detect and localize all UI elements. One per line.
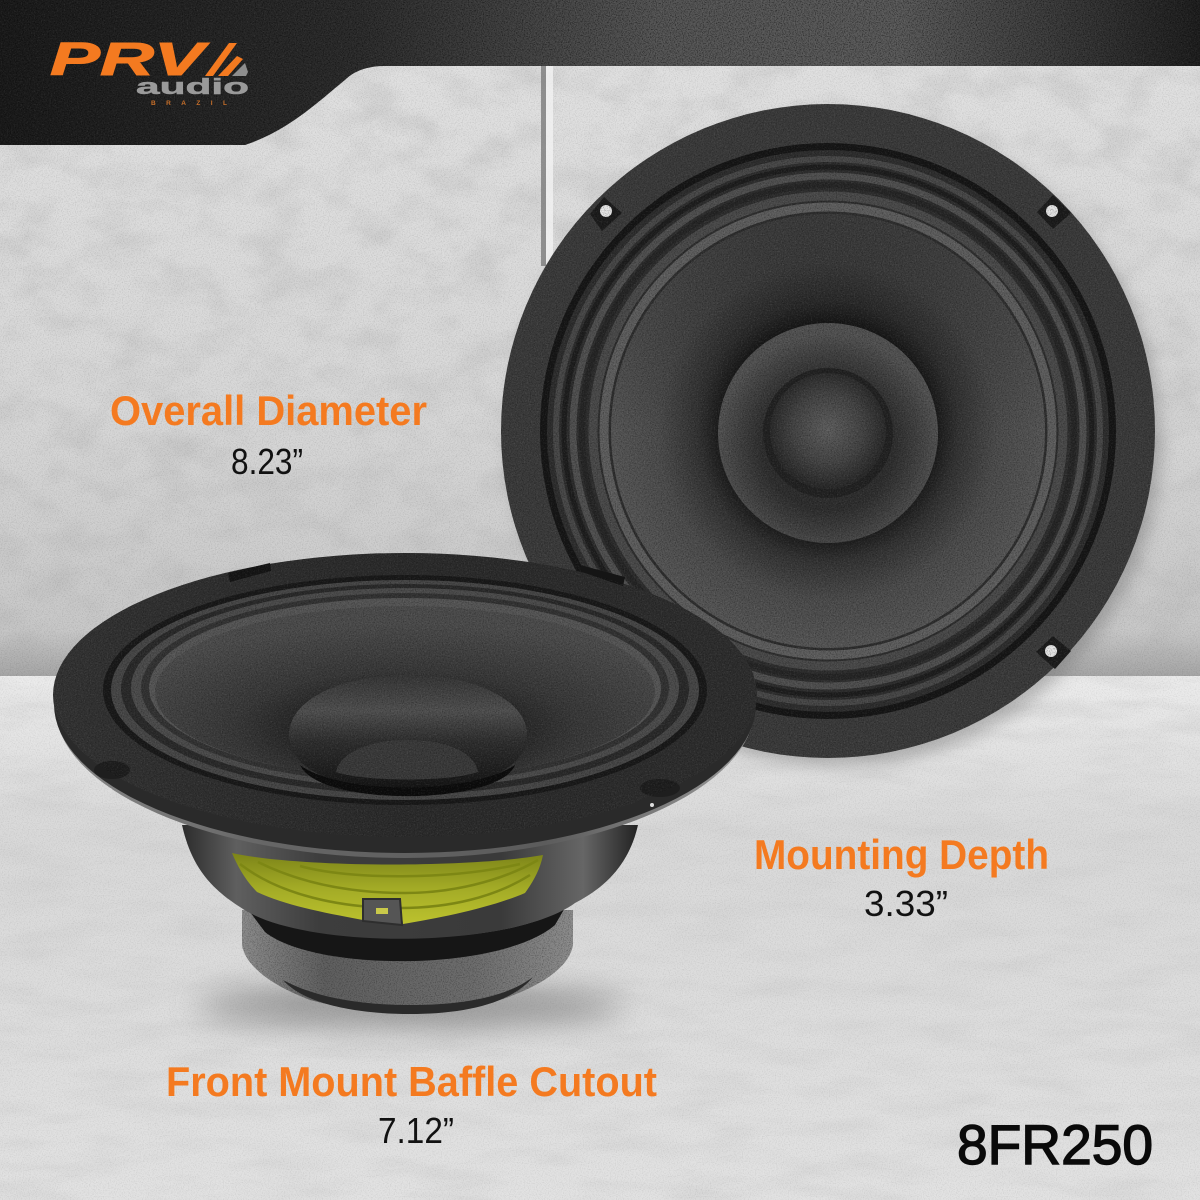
magnet xyxy=(242,910,573,1012)
cone xyxy=(155,606,655,778)
phase plug xyxy=(289,675,527,795)
coil window xyxy=(232,853,543,924)
magnet bottom edge xyxy=(283,977,533,1014)
front speaker: angled view xyxy=(50,550,760,1026)
speaker shadow xyxy=(509,114,1161,766)
logo: PRV Audio Brazil xyxy=(50,33,249,107)
speaker cone xyxy=(611,214,1045,648)
speaker texture xyxy=(500,100,1160,760)
floor shadow xyxy=(195,986,625,1026)
value: 7.12” xyxy=(378,1110,454,1151)
top dark banner xyxy=(0,0,1200,150)
value: 8.23” xyxy=(231,441,303,482)
mounting tabs xyxy=(590,195,1071,669)
speaker surround rings xyxy=(547,150,1109,712)
logo slashes xyxy=(205,43,243,76)
callout: baffle cutout xyxy=(166,1058,657,1151)
callout: overall diameter xyxy=(110,387,427,482)
rim lip xyxy=(55,554,755,858)
label: Front Mount Baffle Cutout xyxy=(166,1058,657,1105)
speaker rim xyxy=(501,104,1155,758)
value: 3.33” xyxy=(864,883,948,924)
coil windings xyxy=(240,860,538,908)
dome xyxy=(336,740,478,780)
speaker bullet phase plug xyxy=(718,323,938,543)
background: concrete wall xyxy=(0,0,1200,678)
model number: 8FR250 xyxy=(957,1113,1153,1176)
logo grey wedge xyxy=(232,63,248,76)
label: Overall Diameter xyxy=(110,387,427,434)
plug shadow xyxy=(300,765,515,796)
logo word PRV: PRV xyxy=(50,33,209,85)
texture xyxy=(50,550,760,840)
surround xyxy=(103,575,707,805)
logo word Brazil: BRAZIL xyxy=(151,100,227,107)
rim xyxy=(53,553,757,837)
background: concrete floor xyxy=(0,676,1200,1200)
basket tab xyxy=(363,899,402,925)
label: Mounting Depth xyxy=(754,831,1049,878)
mounting tabs xyxy=(94,761,130,779)
callout: mounting depth xyxy=(754,831,1049,924)
magnet recess xyxy=(250,906,566,961)
basket xyxy=(182,825,638,939)
logo word audio: audio xyxy=(136,74,249,99)
rear speaker: front view xyxy=(500,100,1161,766)
